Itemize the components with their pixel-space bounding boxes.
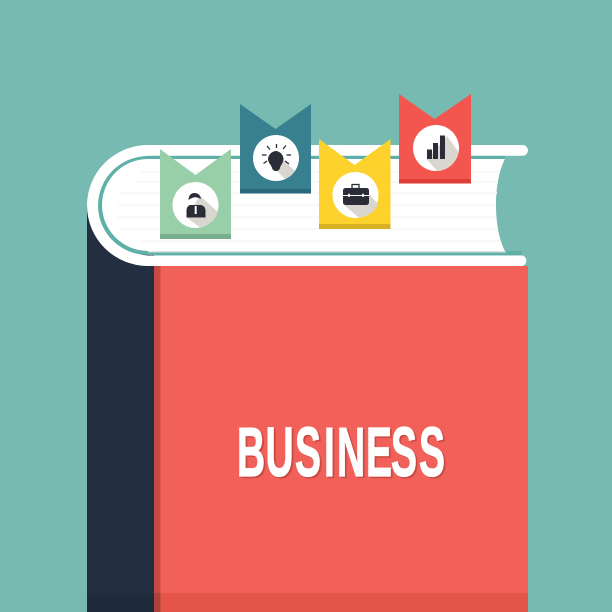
teal inner lining: [98, 156, 522, 255]
icon: person: [186, 193, 218, 228]
book front cover: [154, 266, 528, 612]
icon: briefcase: [343, 184, 378, 218]
bookmark: yellow briefcase: [319, 139, 390, 229]
title: BUSINESS: BUSINESS: [239, 416, 447, 494]
white book cover wrap: [87, 145, 528, 266]
bookmark: red bar chart: [399, 94, 471, 184]
book pages: [102, 159, 506, 252]
book spine: [87, 205, 154, 612]
bookmark: teal light bulb: [240, 104, 311, 194]
title: BUSINESS: BUSINESS: [237, 414, 445, 492]
icon: bar chart: [427, 136, 458, 171]
icon: light bulb: [262, 144, 295, 179]
bookmark: green person: [160, 149, 231, 239]
